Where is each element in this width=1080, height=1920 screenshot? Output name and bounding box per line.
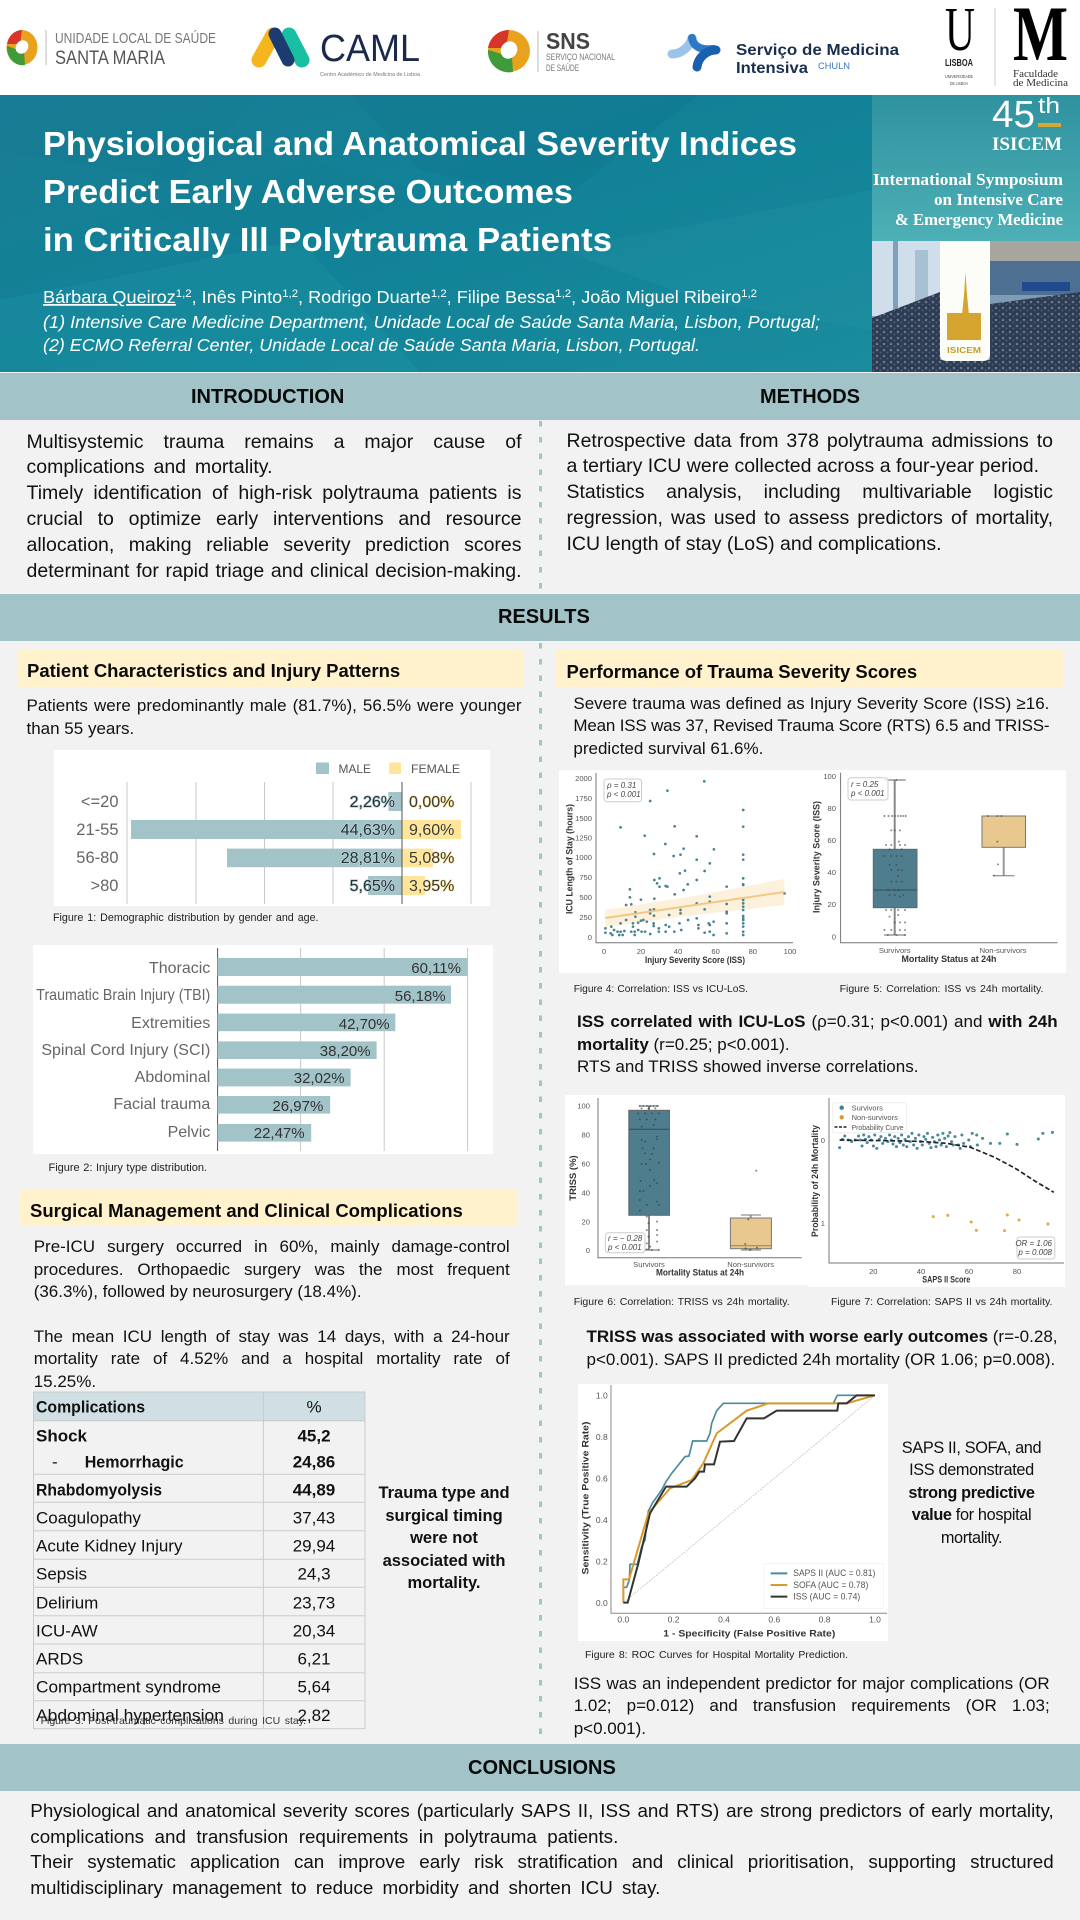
box: non-survivors bbox=[730, 1215, 771, 1250]
values male bbox=[341, 794, 395, 895]
curve: ISS bbox=[623, 1395, 875, 1603]
chart: figure 6 TRISS vs 24h mortality box plot: 60 bbox=[582, 1160, 590, 1168]
text: TRISS association: p<0.001). SAPS II predicted 24h mortality (OR 1.06; p=0.008). bbox=[586, 1350, 1055, 1369]
category labels: Spinal Cord Injury (SCI) bbox=[42, 1042, 211, 1059]
chart: figure 7 SAPS II vs 24h mortality: 60 bbox=[965, 1267, 973, 1276]
chart: figure 4 ISS vs ICU LoS scatter: 1000 bbox=[575, 853, 592, 862]
chart: figure 6 TRISS vs 24h mortality box plot: 40 bbox=[582, 1188, 590, 1198]
chart: figure 5 ISS vs 24h mortality box plot bbox=[805, 770, 1066, 973]
text: patient characteristics: than 55 years. bbox=[26, 719, 134, 738]
authors and affiliations: , Rodrigo Duarte bbox=[298, 287, 431, 307]
text: conclusions: multidisciplinary management to reduce morbidity and shorten ICU stay. bbox=[30, 1877, 660, 1898]
chart: figure 4 ISS vs ICU LoS scatter: Injury Severity Score (ISS) bbox=[645, 955, 745, 966]
table values: 37,43 bbox=[293, 1508, 335, 1527]
legend keys bbox=[771, 1573, 787, 1597]
chart: figure 6 TRISS vs 24h mortality box plot: 0 bbox=[586, 1246, 590, 1255]
text: patient characteristics: Patients were predominantly male (81.7%), 56.5% were younger bbox=[26, 696, 522, 715]
callout: trauma type and surgical timing: associated with bbox=[383, 1552, 505, 1570]
logo: Servico de Medicina Intensiva: CHULN bbox=[818, 61, 850, 71]
chart: figure 4 ISS vs ICU LoS scatter: 80 bbox=[749, 947, 757, 956]
legend labels: SOFA (AUC = 0.78) bbox=[793, 1580, 868, 1590]
logo: Universidade de Lisboa bbox=[945, 0, 995, 86]
logo: Unidade Local de Saude Santa Maria: UNIDADE LOCAL DE SAÚDE bbox=[55, 30, 216, 47]
chart: figure 6 TRISS vs 24h mortality box plot: Non-survivors bbox=[727, 1260, 774, 1269]
value labels: 56,18% bbox=[395, 988, 446, 1005]
annotation: p < 0.001 bbox=[607, 1243, 642, 1252]
annotation: r = − 0.28 bbox=[608, 1234, 643, 1243]
text: introduction: crucial to optimize early interventions and resource bbox=[26, 508, 522, 530]
text: ISS correlations: mortality (r=0.25; p<0.001). bbox=[577, 1035, 790, 1054]
legend bbox=[833, 1103, 907, 1133]
chart: figure 7 SAPS II vs 24h mortality: 40 bbox=[917, 1267, 925, 1276]
box: survivors bbox=[629, 1106, 670, 1250]
chart: figure 5 ISS vs 24h mortality box plot: 0 bbox=[832, 932, 836, 942]
text: ICU stay and mortality: The mean ICU length of stay was 14 days, with a 24-hour bbox=[34, 1326, 510, 1346]
table labels: ARDS bbox=[36, 1649, 83, 1668]
authors and affiliations: (2) ECMO Referral Center, Unidade Local de Saúde Santa Maria, Lisbon, Portugal. bbox=[43, 335, 700, 355]
chart: figure 8 ROC curves: 0.8 bbox=[596, 1432, 608, 1442]
axes bbox=[611, 1385, 887, 1613]
text: conclusions: complications and transfusion requirements in polytrauma patients. bbox=[30, 1826, 618, 1847]
header logo strip bbox=[0, 0, 1080, 95]
text: introduction: complications and mortality. bbox=[26, 456, 272, 478]
logo: CAML: CAML bbox=[320, 28, 420, 70]
banner with title and authors bbox=[0, 95, 872, 372]
authors and affiliations: 1,2 bbox=[741, 288, 757, 300]
text: ISS correlations: ISS correlated with ICU-LoS (ρ=0.31; p<0.001) and with 24h bbox=[577, 1012, 1058, 1031]
text: severe trauma definition: predicted survival 61.6%. bbox=[573, 739, 763, 758]
age labels: 21-55 bbox=[76, 821, 118, 839]
legend labels bbox=[793, 1568, 875, 1602]
table values: 44,89 bbox=[293, 1481, 335, 1500]
congress panel: 45th ISICEM bbox=[872, 95, 1080, 372]
caption: figure 5: Figure 5: Correlation: ISS vs 24h mortality. bbox=[840, 983, 1043, 995]
category labels: Thoracic bbox=[149, 960, 211, 977]
legend bbox=[316, 762, 460, 776]
category labels: Abdominal bbox=[135, 1069, 211, 1086]
chart: figure 8 ROC curves: 0.0 bbox=[596, 1598, 608, 1608]
text: surgery: (36.3%), followed by neurosurgery (18.4%). bbox=[34, 1282, 362, 1301]
text: introduction bbox=[26, 431, 522, 582]
values female: 9,60% bbox=[409, 822, 454, 839]
chart: figure 4 ISS vs ICU LoS scatter bbox=[559, 770, 805, 973]
legend: Survivors bbox=[852, 1104, 883, 1112]
symposium heading text: & Emergency Medicine bbox=[895, 210, 1063, 229]
chart: figure 4 ISS vs ICU LoS scatter: 250 bbox=[579, 913, 592, 922]
chart: figure 5 ISS vs 24h mortality box plot: Survivors bbox=[879, 946, 911, 955]
chart: figure 6 TRISS vs 24h mortality box plot: 100 bbox=[577, 1102, 590, 1110]
chart: figure 4 ISS vs ICU LoS scatter: 1500 bbox=[575, 814, 592, 823]
axes bbox=[596, 773, 793, 943]
chart: figure 4 ISS vs ICU LoS scatter: 750 bbox=[579, 873, 592, 882]
text: ISS independent predictor bbox=[574, 1674, 1050, 1738]
text: methods: regression, was used to assess predictors of mortality, bbox=[566, 507, 1053, 529]
text: conclusions bbox=[30, 1800, 1054, 1898]
table labels: ICU-AW bbox=[36, 1622, 98, 1641]
value labels: 42,70% bbox=[339, 1016, 390, 1033]
heading: introduction: INTRODUCTION bbox=[191, 386, 344, 408]
ISICEM badge: ISICEM bbox=[947, 346, 981, 355]
callout: trauma type and surgical timing: were not bbox=[410, 1529, 478, 1547]
text: methods bbox=[566, 430, 1053, 555]
table labels: Acute Kidney Injury bbox=[36, 1537, 183, 1556]
values male: 28,81% bbox=[341, 850, 395, 867]
authors and affiliations: , Inês Pinto bbox=[192, 287, 282, 307]
authors and affiliations: (1) Intensive Care Medicine Department, Unidade Local de Saúde Santa Maria, Lisbon, Portugal; bbox=[43, 312, 820, 332]
text: conclusions: Their systematic application can improve early risk stratification and clinical prioritisation, supporting structured bbox=[30, 1851, 1054, 1872]
chart: figure 4 ISS vs ICU LoS scatter: 20 bbox=[637, 947, 645, 956]
annotation: p = 0.008 bbox=[1017, 1248, 1053, 1257]
table values: 2,82 bbox=[297, 1706, 331, 1725]
table values: 45,2 bbox=[297, 1427, 331, 1446]
table labels: Complications bbox=[36, 1398, 145, 1417]
legend labels: SAPS II (AUC = 0.81) bbox=[793, 1568, 875, 1578]
chart: figure 1 demographic distribution bbox=[54, 750, 490, 906]
chart: figure 7 SAPS II vs 24h mortality: 0 bbox=[821, 1136, 825, 1145]
chart: figure 7 SAPS II vs 24h mortality bbox=[808, 1095, 1065, 1287]
table values: 5,64 bbox=[297, 1678, 331, 1697]
chart: figure 4 ISS vs ICU LoS scatter: 500 bbox=[579, 893, 592, 902]
text: ISS independent predictor: p<0.001). bbox=[574, 1719, 646, 1738]
non-survivor points bbox=[933, 1215, 1048, 1231]
text: ICU stay and mortality: 15.25%. bbox=[34, 1372, 96, 1391]
values female: 3,95% bbox=[409, 878, 454, 895]
logo: Unidade Local de Saude Santa Maria bbox=[6, 30, 216, 69]
text: ISS correlations: RTS and TRISS showed inverse correlations. bbox=[577, 1057, 918, 1076]
text: TRISS association bbox=[586, 1327, 1058, 1369]
bars: female bbox=[402, 820, 461, 895]
chart: figure 8 ROC curves: Sensitivity (True Positive Rate) bbox=[580, 1422, 592, 1574]
chart: figure 7 SAPS II vs 24h mortality: 1 bbox=[821, 1219, 825, 1228]
text: severe trauma definition: Mean ISS was 37, Revised Trauma Score (RTS) 6.5 and TRISS- bbox=[573, 716, 1049, 735]
symposium heading text bbox=[873, 93, 1063, 229]
annotation bbox=[605, 1233, 645, 1253]
symposium heading text: ISICEM bbox=[992, 134, 1062, 155]
authors and affiliations: 1,2 bbox=[555, 288, 571, 300]
table labels: - bbox=[52, 1453, 58, 1472]
symposium heading text: on Intensive Care bbox=[934, 190, 1063, 209]
box: non-survivors bbox=[982, 816, 1026, 876]
chart: figure 5 ISS vs 24h mortality box plot: Mortality Status at 24h bbox=[902, 954, 997, 965]
table values: 29,94 bbox=[293, 1537, 335, 1556]
section bar: introduction and methods bbox=[0, 372, 1080, 420]
annotation bbox=[1015, 1237, 1055, 1259]
value labels: 32,02% bbox=[294, 1070, 345, 1087]
table: complications bbox=[33, 1392, 366, 1730]
annotation: OR = 1.06 bbox=[1015, 1239, 1053, 1248]
table labels: Rhabdomyolysis bbox=[36, 1481, 162, 1500]
callout: strong predictive value: ISS demonstrated bbox=[909, 1461, 1034, 1479]
chart: figure 4 ISS vs ICU LoS scatter: 0 bbox=[588, 933, 592, 942]
chart: figure 5 ISS vs 24h mortality box plot: 80 bbox=[828, 804, 836, 813]
table labels: Sepsis bbox=[36, 1564, 87, 1583]
survivor points bbox=[840, 1132, 1052, 1148]
text: methods: Statistics analysis, including multivariable logistic bbox=[566, 481, 1053, 503]
diagonal reference bbox=[623, 1395, 875, 1603]
logo: SNS: SNS bbox=[546, 28, 590, 54]
axes bbox=[829, 1098, 1064, 1263]
chart: figure 7 SAPS II vs 24h mortality: SAPS II Score bbox=[922, 1275, 970, 1286]
chart: figure 4 ISS vs ICU LoS scatter: 0 bbox=[602, 947, 606, 956]
caption: figure 1: Figure 1: Demographic distribution by gender and age. bbox=[53, 912, 318, 924]
logo: SNS: DE SAÚDE bbox=[546, 63, 579, 73]
scatter points bbox=[605, 781, 785, 935]
caption: figure 7: Figure 7: Correlation: SAPS II vs 24h mortality. bbox=[831, 1296, 1052, 1308]
chart: figure 4 ISS vs ICU LoS scatter: 40 bbox=[674, 947, 682, 956]
box: survivors bbox=[873, 780, 917, 935]
text: TRISS association: TRISS was associated with worse early outcomes (r=-0.28, bbox=[586, 1327, 1058, 1346]
authors and affiliations: , João Miguel Ribeiro bbox=[571, 287, 741, 307]
annotation: ρ = 0.31 bbox=[606, 781, 636, 790]
table values bbox=[293, 1398, 335, 1725]
chart: figure 4 ISS vs ICU LoS scatter: 2000 bbox=[575, 774, 592, 783]
authors and affiliations: Bárbara Queiroz bbox=[43, 287, 176, 307]
callout: strong predictive value: mortality. bbox=[941, 1529, 1002, 1547]
callout: strong predictive value: strong predictive bbox=[908, 1484, 1035, 1502]
value labels bbox=[254, 960, 461, 1142]
chart: figure 8 ROC curves: 0.2 bbox=[668, 1614, 680, 1624]
heading: methods: METHODS bbox=[760, 386, 860, 408]
text: introduction: allocation, making reliable severity prediction scores bbox=[26, 534, 522, 556]
text: ISS independent predictor: 1.02; p=0.012) and transfusion requirements (OR 1.03; bbox=[574, 1696, 1050, 1715]
callout: trauma type and surgical timing: mortality. bbox=[407, 1574, 481, 1592]
chart: figure 6 TRISS vs 24h mortality box plot: Mortality Status at 24h bbox=[656, 1268, 744, 1279]
legend: Non-survivors bbox=[852, 1113, 898, 1122]
callout: strong predictive value: value for hospital bbox=[912, 1506, 1031, 1524]
category labels: Pelvic bbox=[168, 1124, 211, 1141]
chart: figure 8 ROC curves bbox=[578, 1384, 888, 1641]
logo: Servico de Medicina Intensiva: Serviço de Medicina bbox=[736, 42, 899, 59]
age labels: <=20 bbox=[81, 793, 118, 811]
logo: CAML bbox=[259, 28, 420, 78]
logo: Universidade de Lisboa: UNIVERSIDADE bbox=[945, 74, 973, 79]
chart: figure 7 SAPS II vs 24h mortality: 20 bbox=[869, 1267, 878, 1276]
logo: Faculdade de Medicina: de Medicina bbox=[1013, 78, 1069, 89]
annotation bbox=[604, 779, 642, 802]
probability curve bbox=[840, 1140, 1054, 1192]
text: ISS correlations bbox=[577, 1012, 1058, 1076]
legend: Probability Curve bbox=[852, 1123, 904, 1132]
curve: SAPS II bbox=[623, 1395, 875, 1603]
text: ICU stay and mortality: mortality rate of 4.52% and a hospital mortality rate of bbox=[34, 1349, 510, 1368]
age labels: >80 bbox=[90, 877, 118, 895]
values male: 44,63% bbox=[341, 822, 395, 839]
section bar: results bbox=[0, 594, 1080, 641]
subheading text: Patient Characteristics and Injury Patterns bbox=[27, 660, 400, 681]
chart: figure 6 TRISS vs 24h mortality box plot bbox=[565, 1095, 808, 1285]
table values: 23,73 bbox=[293, 1593, 335, 1612]
logo: SNS bbox=[488, 28, 615, 73]
annotation: p < 0.001 bbox=[850, 789, 885, 798]
chart: figure 5 ISS vs 24h mortality box plot: 20 bbox=[828, 900, 836, 909]
chart: figure 8 ROC curves: 0.6 bbox=[768, 1614, 780, 1624]
logo: Universidade de Lisboa: LISBOA bbox=[945, 58, 973, 69]
chart: figure 7 SAPS II vs 24h mortality: Probability of 24h Mortality bbox=[810, 1124, 821, 1237]
chart: figure 5 ISS vs 24h mortality box plot: 60 bbox=[828, 836, 836, 845]
heading: results: RESULTS bbox=[498, 606, 590, 628]
section bar: conclusions bbox=[0, 1744, 1080, 1791]
table labels: Delirium bbox=[36, 1593, 98, 1612]
caption: figure 3: Figure 3: Post-traumatic complications during ICU stay. bbox=[41, 1715, 306, 1727]
text: methods: a tertiary ICU were collected across a four-year period. bbox=[566, 455, 1039, 477]
table values: 24,86 bbox=[293, 1453, 335, 1472]
table values: 20,34 bbox=[293, 1622, 335, 1641]
jittered points bbox=[884, 780, 1001, 935]
legend labels: ISS (AUC = 0.74) bbox=[793, 1592, 860, 1602]
table labels: Compartment syndrome bbox=[36, 1678, 221, 1697]
table labels: Shock bbox=[36, 1427, 88, 1446]
text: methods: Retrospective data from 378 polytrauma admissions to bbox=[566, 430, 1053, 452]
text: surgery: Pre-ICU surgery occurred in 60%, mainly damage-control bbox=[34, 1237, 510, 1256]
congress hall photo bbox=[872, 241, 1080, 372]
chart: figure 6 TRISS vs 24h mortality box plot: 80 bbox=[582, 1130, 590, 1140]
text: surgery: procedures. Orthopaedic surgery was the most frequent bbox=[34, 1260, 510, 1279]
category labels bbox=[37, 960, 211, 1141]
chart: figure 7 SAPS II vs 24h mortality: 80 bbox=[1013, 1267, 1021, 1276]
value labels: 26,97% bbox=[273, 1098, 324, 1115]
values male: 5,65% bbox=[350, 878, 395, 895]
text: patient characteristics bbox=[26, 696, 522, 738]
axes bbox=[598, 1098, 802, 1258]
title bbox=[43, 126, 797, 259]
text: introduction: Multisystemic trauma remains a major cause of bbox=[26, 431, 522, 453]
table labels: Coagulopathy bbox=[36, 1508, 141, 1527]
value labels: 38,20% bbox=[320, 1043, 371, 1060]
chart: figure 8 ROC curves: 1 - Specificity (False Positive Rate) bbox=[663, 1629, 835, 1640]
symposium heading text: 45 bbox=[992, 95, 1035, 136]
text: introduction: determinant for rapid triage and clinical decision-making. bbox=[26, 560, 522, 582]
text: severe trauma definition bbox=[573, 694, 1049, 758]
bars bbox=[218, 958, 468, 1142]
authors and affiliations: , Filipe Bessa bbox=[447, 287, 556, 307]
text: ICU stay and mortality bbox=[34, 1326, 510, 1391]
caption: figure 4: Figure 4: Correlation: ISS vs ICU-LoS. bbox=[574, 984, 748, 995]
chart: figure 8 ROC curves: 0.0 bbox=[617, 1614, 629, 1624]
chart: figure 4 ISS vs ICU LoS scatter: 1750 bbox=[575, 794, 592, 803]
text: ISS independent predictor: ISS was an independent predictor for major complications (OR bbox=[574, 1674, 1050, 1693]
subheading: patient characteristics bbox=[17, 650, 524, 688]
chart: figure 5 ISS vs 24h mortality box plot: 100 bbox=[823, 772, 836, 781]
chart: figure 6 TRISS vs 24h mortality box plot: 20 bbox=[582, 1218, 590, 1226]
values female: 5,08% bbox=[409, 850, 454, 867]
title: Predict Early Adverse Outcomes bbox=[43, 174, 573, 211]
table labels: Hemorrhagic bbox=[85, 1453, 184, 1472]
chart: figure 8 ROC curves: 0.8 bbox=[819, 1614, 831, 1624]
chart: figure 8 ROC curves: 0.4 bbox=[718, 1614, 730, 1624]
chart: figure 4 ISS vs ICU LoS scatter: 100 bbox=[784, 947, 796, 956]
subheading text: Surgical Management and Clinical Complications bbox=[30, 1200, 463, 1221]
caption: figure 6: Figure 6: Correlation: TRISS vs 24h mortality. bbox=[574, 1296, 790, 1308]
age labels: 56-80 bbox=[76, 849, 118, 867]
chart: figure 5 ISS vs 24h mortality box plot: Injury Severity Score (ISS) bbox=[812, 801, 822, 913]
ISICEM badge bbox=[940, 241, 990, 361]
callout: trauma type and surgical timing bbox=[378, 1484, 510, 1592]
bars: male bbox=[131, 792, 402, 895]
chart: figure 4 ISS vs ICU LoS scatter: 60 bbox=[711, 947, 720, 956]
values male: 2,26% bbox=[350, 794, 395, 811]
title: in Critically Ill Polytrauma Patients bbox=[43, 222, 612, 259]
callout: trauma type and surgical timing: Trauma type and bbox=[378, 1484, 510, 1502]
chart: figure 5 ISS vs 24h mortality box plot: 40 bbox=[828, 868, 836, 877]
authors and affiliations: 1,2 bbox=[431, 288, 447, 300]
trend line bbox=[605, 892, 784, 918]
chart: figure 6 TRISS vs 24h mortality box plot: TRISS (%) bbox=[568, 1155, 579, 1201]
table values: 24,3 bbox=[297, 1564, 331, 1583]
heading: conclusions: CONCLUSIONS bbox=[468, 1757, 616, 1779]
subheading: trauma severity scores bbox=[556, 650, 1063, 687]
annotation: r = 0.25 bbox=[851, 780, 879, 789]
logo: CAML: Centro Académico de Medicina de Lisboa bbox=[320, 72, 420, 78]
chart: figure 8 ROC curves: 0.2 bbox=[596, 1556, 608, 1566]
value labels: 60,11% bbox=[412, 960, 461, 977]
logo: Servico de Medicina Intensiva bbox=[672, 38, 899, 77]
text: surgery bbox=[34, 1237, 510, 1301]
chart: figure 8 ROC curves: 1.0 bbox=[869, 1614, 881, 1624]
table labels: Abdominal hypertension bbox=[36, 1706, 224, 1725]
chart: figure 5 ISS vs 24h mortality box plot: Non-survivors bbox=[980, 946, 1027, 955]
category labels: Traumatic Brain Injury (TBI) bbox=[37, 987, 211, 1004]
annotation bbox=[848, 778, 888, 800]
table values: % bbox=[306, 1398, 322, 1417]
chart: figure 6 TRISS vs 24h mortality box plot: Survivors bbox=[633, 1260, 665, 1269]
caption: figure 8: Figure 8: ROC Curves for Hospital Mortality Prediction. bbox=[585, 1649, 848, 1661]
logo: Faculdade de Medicina: Faculdade bbox=[1013, 69, 1059, 80]
text: severe trauma definition: Severe trauma was defined as Injury Severity Score (ISS) ≥16. bbox=[573, 694, 1049, 713]
category labels: Facial trauma bbox=[114, 1096, 211, 1113]
caption: figure 2: Figure 2: Injury type distribution. bbox=[48, 1162, 207, 1174]
age labels bbox=[76, 793, 118, 895]
text: conclusions: Physiological and anatomical severity scores (particularly SAPS II, ISS and RTS) are strong predictors of early mortality, bbox=[30, 1800, 1054, 1821]
values female: 0,00% bbox=[409, 794, 454, 811]
logo: SNS: SERVIÇO NACIONAL bbox=[546, 52, 615, 62]
subheading: surgical management bbox=[20, 1190, 517, 1226]
axes bbox=[841, 773, 1058, 943]
values female bbox=[409, 794, 454, 895]
text: introduction: Timely identification of high-risk polytrauma patients is bbox=[26, 482, 522, 504]
text: methods: ICU length of stay (LoS) and complications. bbox=[566, 533, 942, 555]
authors and affiliations: 1,2 bbox=[282, 288, 298, 300]
annotation: p < 0.001 bbox=[606, 790, 641, 799]
confidence band bbox=[605, 879, 784, 927]
category labels: Extremities bbox=[132, 1015, 211, 1032]
chart: figure 4 ISS vs ICU LoS scatter: ICU Length of Stay (hours) bbox=[564, 804, 576, 914]
title: Physiological and Anatomical Severity Indices bbox=[43, 126, 797, 163]
jittered points bbox=[638, 1106, 757, 1250]
table values: 6,21 bbox=[297, 1649, 331, 1668]
table labels bbox=[36, 1398, 224, 1725]
logo: Servico de Medicina Intensiva: Intensiva bbox=[736, 60, 808, 77]
chart: figure 8 ROC curves: 1.0 bbox=[596, 1390, 608, 1400]
logo: Universidade de Lisboa: DE LISBOA bbox=[950, 81, 968, 86]
chart: figure 2 injury type distribution bbox=[33, 945, 493, 1154]
chart: figure 4 ISS vs ICU LoS scatter: 1250 bbox=[575, 834, 592, 842]
curve: SOFA bbox=[623, 1395, 875, 1603]
callout: strong predictive value bbox=[902, 1438, 1041, 1547]
symposium heading text: International Symposium bbox=[873, 170, 1063, 189]
value labels: 22,47% bbox=[254, 1125, 305, 1142]
authors and affiliations: 1,2 bbox=[176, 288, 192, 300]
legend: MALE bbox=[338, 762, 371, 776]
authors and affiliations bbox=[43, 287, 820, 355]
legend: FEMALE bbox=[411, 762, 460, 776]
callout: strong predictive value: SAPS II, SOFA, and bbox=[902, 1438, 1041, 1456]
callout: trauma type and surgical timing: surgical timing bbox=[385, 1506, 503, 1524]
logo: Unidade Local de Saude Santa Maria: SANTA MARIA bbox=[55, 48, 165, 69]
subheading text: Performance of Trauma Severity Scores bbox=[566, 660, 917, 682]
chart: figure 8 ROC curves: 0.4 bbox=[596, 1515, 608, 1525]
chart: figure 8 ROC curves: 0.6 bbox=[596, 1474, 608, 1484]
